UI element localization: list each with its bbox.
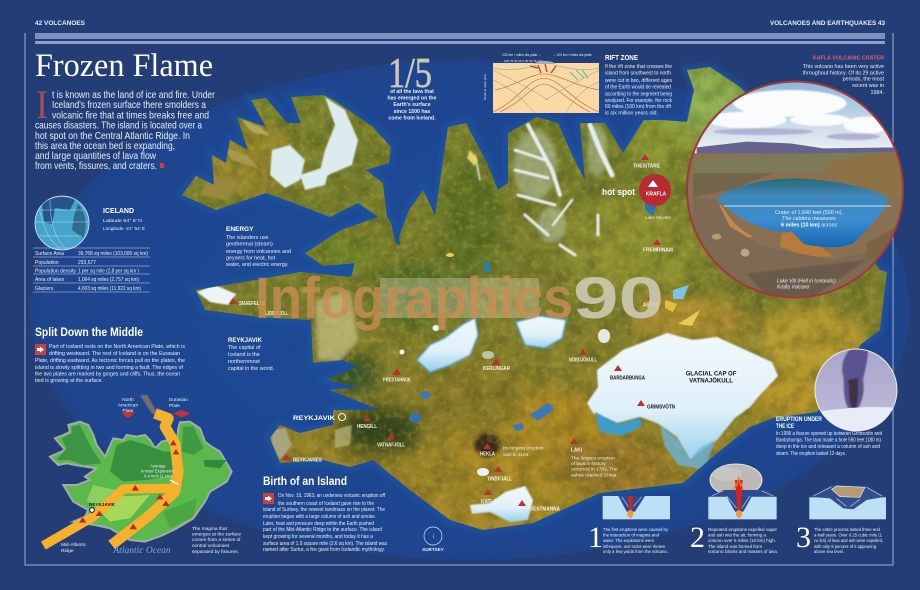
text: Birth of an Island: island of Surtsey, the newest landmass on the planet. The: [263, 507, 385, 513]
heading: Split Down the Middle: Split Down the Middle: [35, 327, 143, 339]
rift zone diagram: [483, 53, 599, 113]
text: Split Down the Middle: island is slowly splitting in two and forming a fault. The edges of: [35, 365, 183, 371]
inset map: mid-Atlantic ridge across Iceland: [43, 395, 232, 546]
text: Split Down the Middle: Part of Iceland rests on the North American Plate, which is: [49, 344, 185, 350]
inset map labels: Ridge: [61, 548, 74, 554]
text: Krafla volcanic crater: 1984.: [870, 90, 884, 96]
note: Laki eruption: occurred in 1783. The: [571, 466, 618, 472]
rift triangles: [79, 440, 179, 529]
step 1 text: water. The explosions were: [603, 538, 654, 544]
text: Energy: [225, 226, 291, 268]
birth of an island heading: Birth of an Island: [263, 476, 347, 488]
note: Laki eruption: ashes reached China.: [571, 472, 618, 478]
callout: one fifth of lava: has emerged on the: [387, 96, 437, 102]
text: Birth of an Island: On Nov. 15, 1963, an undersea volcanic eruption off: [278, 493, 385, 499]
hot spot label: hot spot: [602, 187, 635, 197]
Iceland facts table: 1,064 sq miles (2,757 sq km): [78, 277, 139, 283]
intro text: from vents, fissures, and craters.: [35, 160, 157, 172]
watermark: 90: [573, 266, 664, 331]
volcano labels: HEKLA: [480, 452, 495, 458]
step 1 text: only a few yards from the volcano.: [603, 549, 668, 555]
intro text: and large quantities of lava flow: [35, 150, 156, 162]
inset map labels: Eurasian: [169, 397, 188, 403]
inset map labels: [61, 397, 241, 556]
inset map labels: central volcanoes: [192, 543, 230, 549]
Iceland facts table: 1 per sq mile (2.8 per sq km ): [78, 268, 139, 274]
step 2 text: Repeated eruptions expelled vapor: [708, 527, 777, 533]
text: Krafla volcanic crater: throughout history. Of its 29 active: [803, 70, 884, 76]
text: Eruption under the ice: Bardarbunga. The lava made a hole 590 feet (180 m): [776, 438, 881, 444]
step 3 text: The entire process lasted three-and: [814, 527, 880, 533]
text: Split Down the Middle: the two plates are marked by gorges and cliffs. Thus, the ocean: [35, 372, 180, 378]
intro text: [35, 82, 215, 172]
text: Split Down the Middle: [35, 344, 185, 384]
text: Birth of an Island: kept growing for several months, and today it has a: [263, 534, 373, 540]
inset map labels: comes from a series of: [192, 537, 241, 543]
small ice caps: [400, 325, 610, 359]
text: Energy: geothermal (steam): [226, 242, 273, 248]
volcano labels: SNAEFELLS: [239, 301, 266, 307]
Hofsjokull: [516, 316, 566, 348]
photo caption: Lake Viti (Hell in Icelandic): [777, 278, 836, 284]
volcano labels: KATLA: [481, 499, 497, 505]
volcano labels: GRIMSVÖTN: [647, 404, 675, 410]
text: Rift Zone: were cut in two, different ages: [604, 78, 672, 84]
text: Birth of an Island: part of the Mid-Atlantic Ridge to the surface. The island: [263, 527, 382, 533]
Iceland facts table: Surface Area: [35, 251, 64, 257]
label: glacial cap of Vatnajokull: GLACIAL CAP OF: [686, 372, 737, 378]
Iceland facts table: 4,603 sq miles (11,922 sq km): [78, 286, 141, 292]
Reykjanes lava: [272, 428, 292, 460]
text: Krafla volcanic crater: periods, the most: [843, 76, 884, 82]
caldera caption: Crater of 1,640 feet (500 m).: [775, 210, 843, 216]
callout: one fifth of lava: Earth's surface: [393, 102, 431, 108]
inset map labels: American: [118, 402, 138, 408]
step 3 text: cu km) of lava and ash were expelled,: [814, 538, 883, 544]
Iceland facts table: Area of lakes: [35, 277, 65, 283]
Iceland facts table: Glaciers: [35, 286, 54, 292]
text: Rift Zone: is six million years old.: [605, 111, 658, 117]
callout: one fifth of lava: 1/5: [388, 51, 432, 97]
rift zone diagram: → 120 km / miles dis plate: [552, 53, 592, 57]
step 1 text: [603, 527, 669, 555]
step 2 text: and ash into the air, forming a: [708, 532, 766, 538]
text: Reykjavik: northernmost: [228, 359, 260, 365]
text: Krafla volcanic crater: KAFLA VOLCANIC CRATER: [813, 56, 884, 62]
inset map labels: emerges at the surface: [192, 532, 241, 538]
hot spot marker: Krafla: KRAFLA: [646, 192, 667, 198]
Langjokull: [417, 318, 478, 372]
text: Birth of an Island: Later, heat and pressure deep within the Earth pushed: [263, 521, 374, 527]
rift zone diagram: 120 km / miles dis plate ←: [502, 53, 542, 57]
callout: one fifth of lava: [387, 51, 437, 122]
Iceland facts table: [33, 248, 150, 292]
caldera caption: [775, 210, 843, 228]
inset map labels: 0.4 inch (1 cm): [144, 474, 172, 478]
step 3 text: [814, 527, 883, 555]
step 3 diagram: [809, 485, 886, 519]
text: Reykjavik: [228, 338, 274, 372]
text: Energy: water, and electric energy.: [225, 262, 289, 268]
header band: [35, 33, 885, 44]
text: Eruption under the ice: ERUPTION UNDER: [776, 416, 822, 423]
text: Energy: ENERGY: [226, 226, 254, 233]
Iceland fact heading: ICELAND: [103, 206, 135, 215]
volcano labels: THEISTARE: [633, 164, 661, 170]
note: Laki eruption: The longest eruption: [571, 456, 615, 462]
Iceland fact heading: Latitude 64° 6' N: [103, 218, 143, 224]
text: Energy: The islanders use: [226, 235, 269, 241]
text: Eruption under the ice: steam. The eruption lasted 13 days.: [776, 451, 846, 457]
text: Reykjavik: The capital of: [228, 345, 261, 351]
plate arrows: [122, 410, 191, 418]
rift band: [112, 413, 178, 545]
Iceland fact heading: Longitude -21° 54' E: [103, 226, 145, 232]
small lakes and highlights: [393, 150, 705, 431]
volcano labels: PRESTAHNUK: [383, 378, 411, 384]
step 2 text: The island was formed from: [708, 544, 762, 550]
volcano markers: [229, 154, 661, 506]
caldera caption: 6 miles (10 km) across: [781, 222, 837, 228]
inset map labels: Average: [150, 464, 166, 468]
text: Reykjavik: Iceland is the: [228, 352, 260, 358]
text: Birth of an Island: [263, 493, 387, 553]
text: Rift Zone: island from southwest to north: [605, 71, 671, 77]
step 3 text: with only 9 percent of it appearing: [814, 544, 876, 550]
text: Split Down the Middle: bed is growing at the surface.: [35, 378, 103, 384]
icon: globe: [35, 196, 89, 250]
text: Krafla volcanic crater: This volcano has been very active: [803, 64, 884, 70]
title: Frozen Flame: [35, 48, 213, 84]
inset map labels: North: [122, 397, 134, 403]
label: glacial cap of Vatnajokull: VATNAJÖKULL: [689, 378, 733, 384]
volcano labels: ASKJA: [643, 302, 658, 308]
volcano labels: REYKJANES: [293, 458, 323, 464]
text: Birth of an Island: eruption began with a large column of ash and smoke.: [263, 514, 376, 520]
city: Reykjavik: REYKJAVIK: [293, 415, 335, 422]
volcano labels: KERLINGAR: [483, 366, 510, 372]
caldera caption: The caldera measures: [782, 216, 836, 222]
volcano labels: FREMRINAM: [643, 248, 673, 254]
text: Reykjavik: capital in the world.: [228, 366, 274, 372]
watermark: Infographics: [255, 266, 573, 331]
inset map labels: separated by fissures.: [192, 549, 239, 555]
page header right: VOLCANOES AND EARTHQUAKES 43: [770, 20, 885, 27]
text: Rift Zone: of the Earth would be revealed: [605, 85, 671, 91]
step 2 text: [708, 527, 778, 555]
inset map labels: Plate: [123, 408, 134, 414]
intro text: this area the ocean bed is expanding,: [35, 140, 175, 152]
inset map labels: The magma that: [192, 526, 228, 532]
text: Birth of an Island: surface area of 1.0 square mile (2.6 sq km). The island was: [263, 541, 387, 547]
text: Rift Zone: If the rift zone that crosses the: [605, 64, 672, 70]
step 1 diagram: [603, 496, 670, 519]
Vatnajokull: [587, 333, 778, 460]
photo caption: Krafla Volcano: [777, 284, 810, 290]
step 1 text: the interaction of magma and: [603, 532, 659, 538]
text: Birth of an Island: the southern coast of Iceland gave rise to the: [278, 501, 374, 507]
text: Rift Zone: analyzed. For example, the rock: [605, 98, 672, 104]
step 2 text: column over 6 miles (10 km) high.: [708, 538, 776, 544]
intro text: volcanic fire that at times breaks free and: [52, 110, 209, 122]
map of Iceland: [170, 60, 900, 540]
step 1 number: 1: [588, 521, 603, 554]
volcano labels: TINDFJALL: [487, 476, 512, 482]
text: Krafla volcanic crater: [803, 56, 884, 96]
note: Laki eruption: [571, 456, 618, 478]
volcano labels: VESTMANNA: [530, 506, 560, 512]
photo: eruption under the ice: [815, 349, 897, 431]
inset map labels: Atlantic Ocean: [112, 546, 171, 556]
photo: crater lake: [687, 77, 907, 307]
text: Split Down the Middle: drifting westward. The rest of Iceland is on the Eurasian: [49, 351, 180, 357]
intro text: hot spot on the Central Atlantic Ridge. In: [35, 130, 190, 142]
snow haze on the northern peninsulas: [513, 124, 607, 243]
caldera measure line: [724, 205, 891, 207]
text: Rift Zone: RIFT ZONE: [605, 53, 638, 62]
text: Rift Zone: according to the segment being: [605, 91, 672, 97]
text: Energy: geysers for heat, hot: [226, 256, 276, 262]
volcano labels: HENGILL: [357, 424, 377, 430]
page header left: 42 VOLCANOES: [35, 20, 86, 27]
Iceland facts table: Population: [35, 260, 59, 266]
volcano labels: LJOSUFJOLL: [265, 311, 288, 317]
volcano labels: LAKI: [571, 448, 583, 454]
Iceland facts table: 293,577: [78, 260, 96, 266]
volcano labels: NORDJOKULL: [569, 358, 597, 364]
volcano labels: VATNAFJOLL: [377, 442, 405, 448]
step 2 number: 2: [690, 521, 705, 554]
note: Hekla eruption: [503, 446, 544, 458]
icon: birth of an island arrow: [263, 493, 274, 504]
step 3 text: above sea level.: [814, 549, 844, 555]
snow on the northern peninsulas: [475, 125, 612, 255]
text: Rift Zone: [604, 53, 672, 117]
text: Split Down the Middle: Plate, drifting eastward. As tectonic forces pull on the plates, the: [35, 358, 185, 364]
step 1 text: The first eruptions were caused by: [603, 527, 669, 533]
label: glacial cap of Vatnajokull: [686, 372, 737, 384]
city: Reykjavik: [293, 414, 346, 422]
snow on the Westfjords: [200, 97, 358, 200]
callout: one fifth of lava: of all the lava that: [390, 89, 434, 95]
inset map labels: Mid-Atlantic: [61, 542, 87, 548]
locator: Surtsey: SURTSEY: [422, 547, 444, 552]
text: Krafla volcanic crater: recent was in: [852, 83, 884, 89]
Iceland facts table: 39,768 sq miles (103,000 sq km): [78, 251, 148, 257]
drop cap: I: [36, 82, 48, 127]
step 3 text: a-half years. Over 0.25 cubic mile (1: [814, 532, 882, 538]
hot spot marker: Krafla: [639, 174, 671, 206]
locator: Surtsey: [422, 527, 444, 552]
volcano labels: BARDARBUNGA: [610, 376, 645, 382]
text: Eruption under the ice: deep in the ice and released a column of ash and: [776, 444, 880, 450]
inset map labels: Plate: [169, 403, 180, 409]
rift zone diagram: 100 75 50 25 0 25 50 75 100: [504, 59, 543, 63]
text: Rift Zone: 60 miles (100 km) from the rift: [605, 104, 671, 110]
step 3 number: 3: [796, 521, 811, 554]
note: Hekla eruption: Its longest eruption: [503, 446, 544, 452]
volcano labels: [239, 164, 675, 512]
rift ash: [140, 395, 158, 415]
photo caption: [777, 278, 836, 290]
inset map labels: Annual Expansion:: [141, 468, 175, 474]
Iceland facts table: Population density: [35, 268, 76, 274]
text: Eruption under the ice: In 1996 a fissure opened up between Grímsvötn and: [776, 431, 882, 437]
icon: plate arrow: [35, 344, 46, 355]
Iceland fact heading: [103, 206, 145, 232]
intro text: Iceland's frozen surface there smolders a: [52, 99, 206, 111]
intro text: causes disasters. The island is located over a: [35, 120, 202, 132]
rift zone diagram: Depth in miles (km): [483, 74, 487, 100]
note: Laki eruption: of lava in history: [571, 461, 606, 467]
note: Hekla eruption: was in 1104.: [503, 452, 530, 458]
text: Energy: energy from volcanoes and: [226, 249, 291, 255]
Myrdalsjokull: [470, 486, 533, 522]
Snaefellsjokull snow: [197, 285, 236, 305]
text: Birth of an Island: named after Surtur, a fire giant from Icelandic mythology.: [263, 547, 385, 553]
text: Reykjavik: REYKJAVIK: [228, 338, 263, 344]
inset map labels: REYKJAVIK: [89, 502, 116, 507]
text: Eruption under the ice: THE ICE: [776, 423, 794, 430]
callout: one fifth of lava: come from Iceland.: [388, 116, 436, 122]
step 1 text: infrequent, and rocks were thrown: [603, 544, 665, 550]
lava field: [315, 290, 358, 362]
intro text: t is known as the land of ice and fire. Under: [52, 89, 215, 101]
callout: one fifth of lava: since 1500 has: [394, 109, 430, 115]
text: Eruption under the ice: [776, 416, 882, 457]
step 2 diagram: [708, 464, 777, 519]
label: Lake Myvatn: Lake Mývatn: [645, 215, 671, 220]
west rift band: [43, 488, 173, 546]
step 2 text: volcanic blocks and masses of lava.: [708, 549, 778, 555]
